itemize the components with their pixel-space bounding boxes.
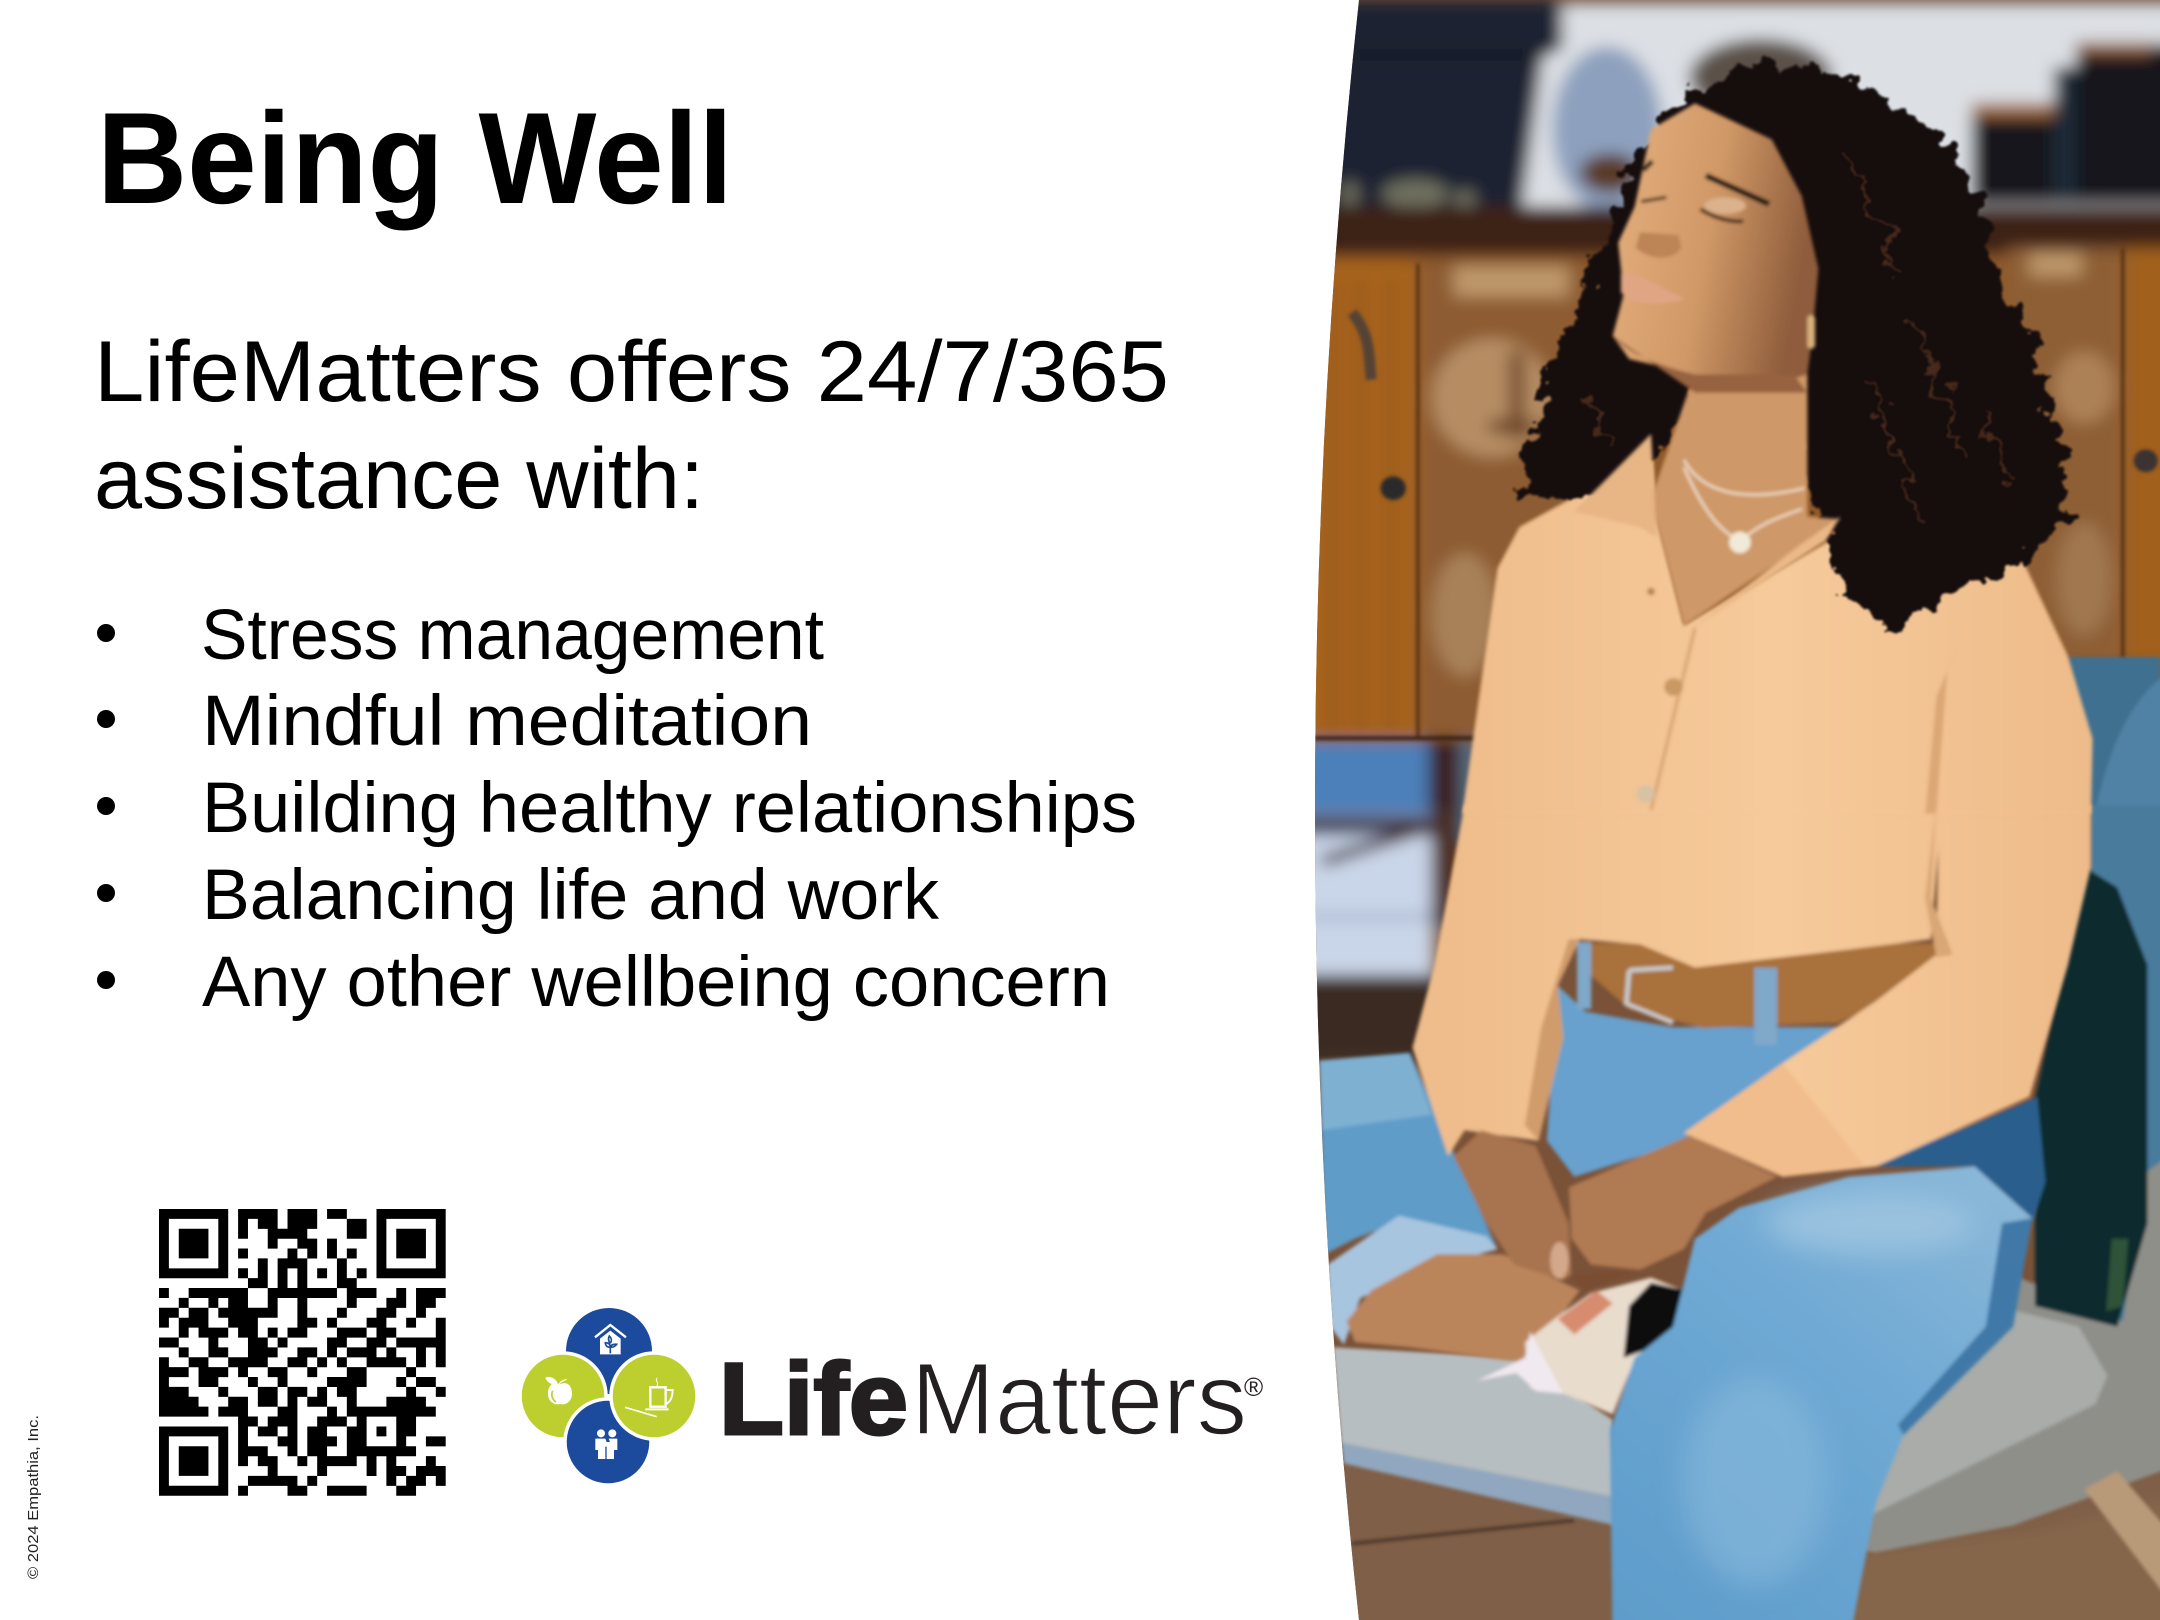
logo wordmark: Life	[719, 1342, 908, 1456]
bullet list: Mindful meditation	[202, 682, 812, 761]
logo wordmark: ®	[1244, 1372, 1263, 1402]
bullet list: Stress management	[201, 596, 824, 675]
logo wordmark	[719, 1342, 1263, 1456]
intro text block	[94, 324, 1169, 527]
intro text block: assistance with:	[94, 431, 704, 527]
bullet list: Building healthy relationships	[202, 769, 1137, 848]
intro text block: LifeMatters offers 24/7/365	[94, 324, 1169, 420]
bullet list: Any other wellbeing concern	[202, 943, 1110, 1022]
hair curl highlights	[1585, 155, 2013, 517]
icon: coffee cup and pencil	[625, 1378, 673, 1417]
icon: house with plant	[595, 1325, 626, 1354]
LifeMatters logo	[520, 1308, 1263, 1485]
woman face and neck	[1574, 103, 1840, 633]
woman upper body: shirt	[1462, 439, 2093, 814]
woman lower body	[1319, 805, 2091, 1620]
chair and seat	[1333, 657, 2160, 1620]
bullet list: Balancing life and work	[202, 856, 939, 935]
photo: woman meditating on a chair	[1245, 0, 2160, 1620]
icon: two people	[595, 1429, 617, 1459]
title: Being Well	[97, 85, 733, 231]
QR code	[159, 1209, 446, 1496]
wood knobs and cabinet details	[1314, 248, 2158, 740]
copyright note: © 2024 Empathia, Inc.	[25, 1415, 42, 1579]
icon: apple	[546, 1377, 572, 1404]
lower background	[1245, 810, 2160, 1620]
bullet list	[97, 596, 1137, 1022]
photo background: cabinet, wall, plant pot, jars	[1245, 0, 2160, 1620]
logo wordmark: Matters	[911, 1342, 1247, 1456]
woman hair	[1517, 62, 2071, 633]
logo mark: four interlocking circles	[520, 1308, 697, 1485]
